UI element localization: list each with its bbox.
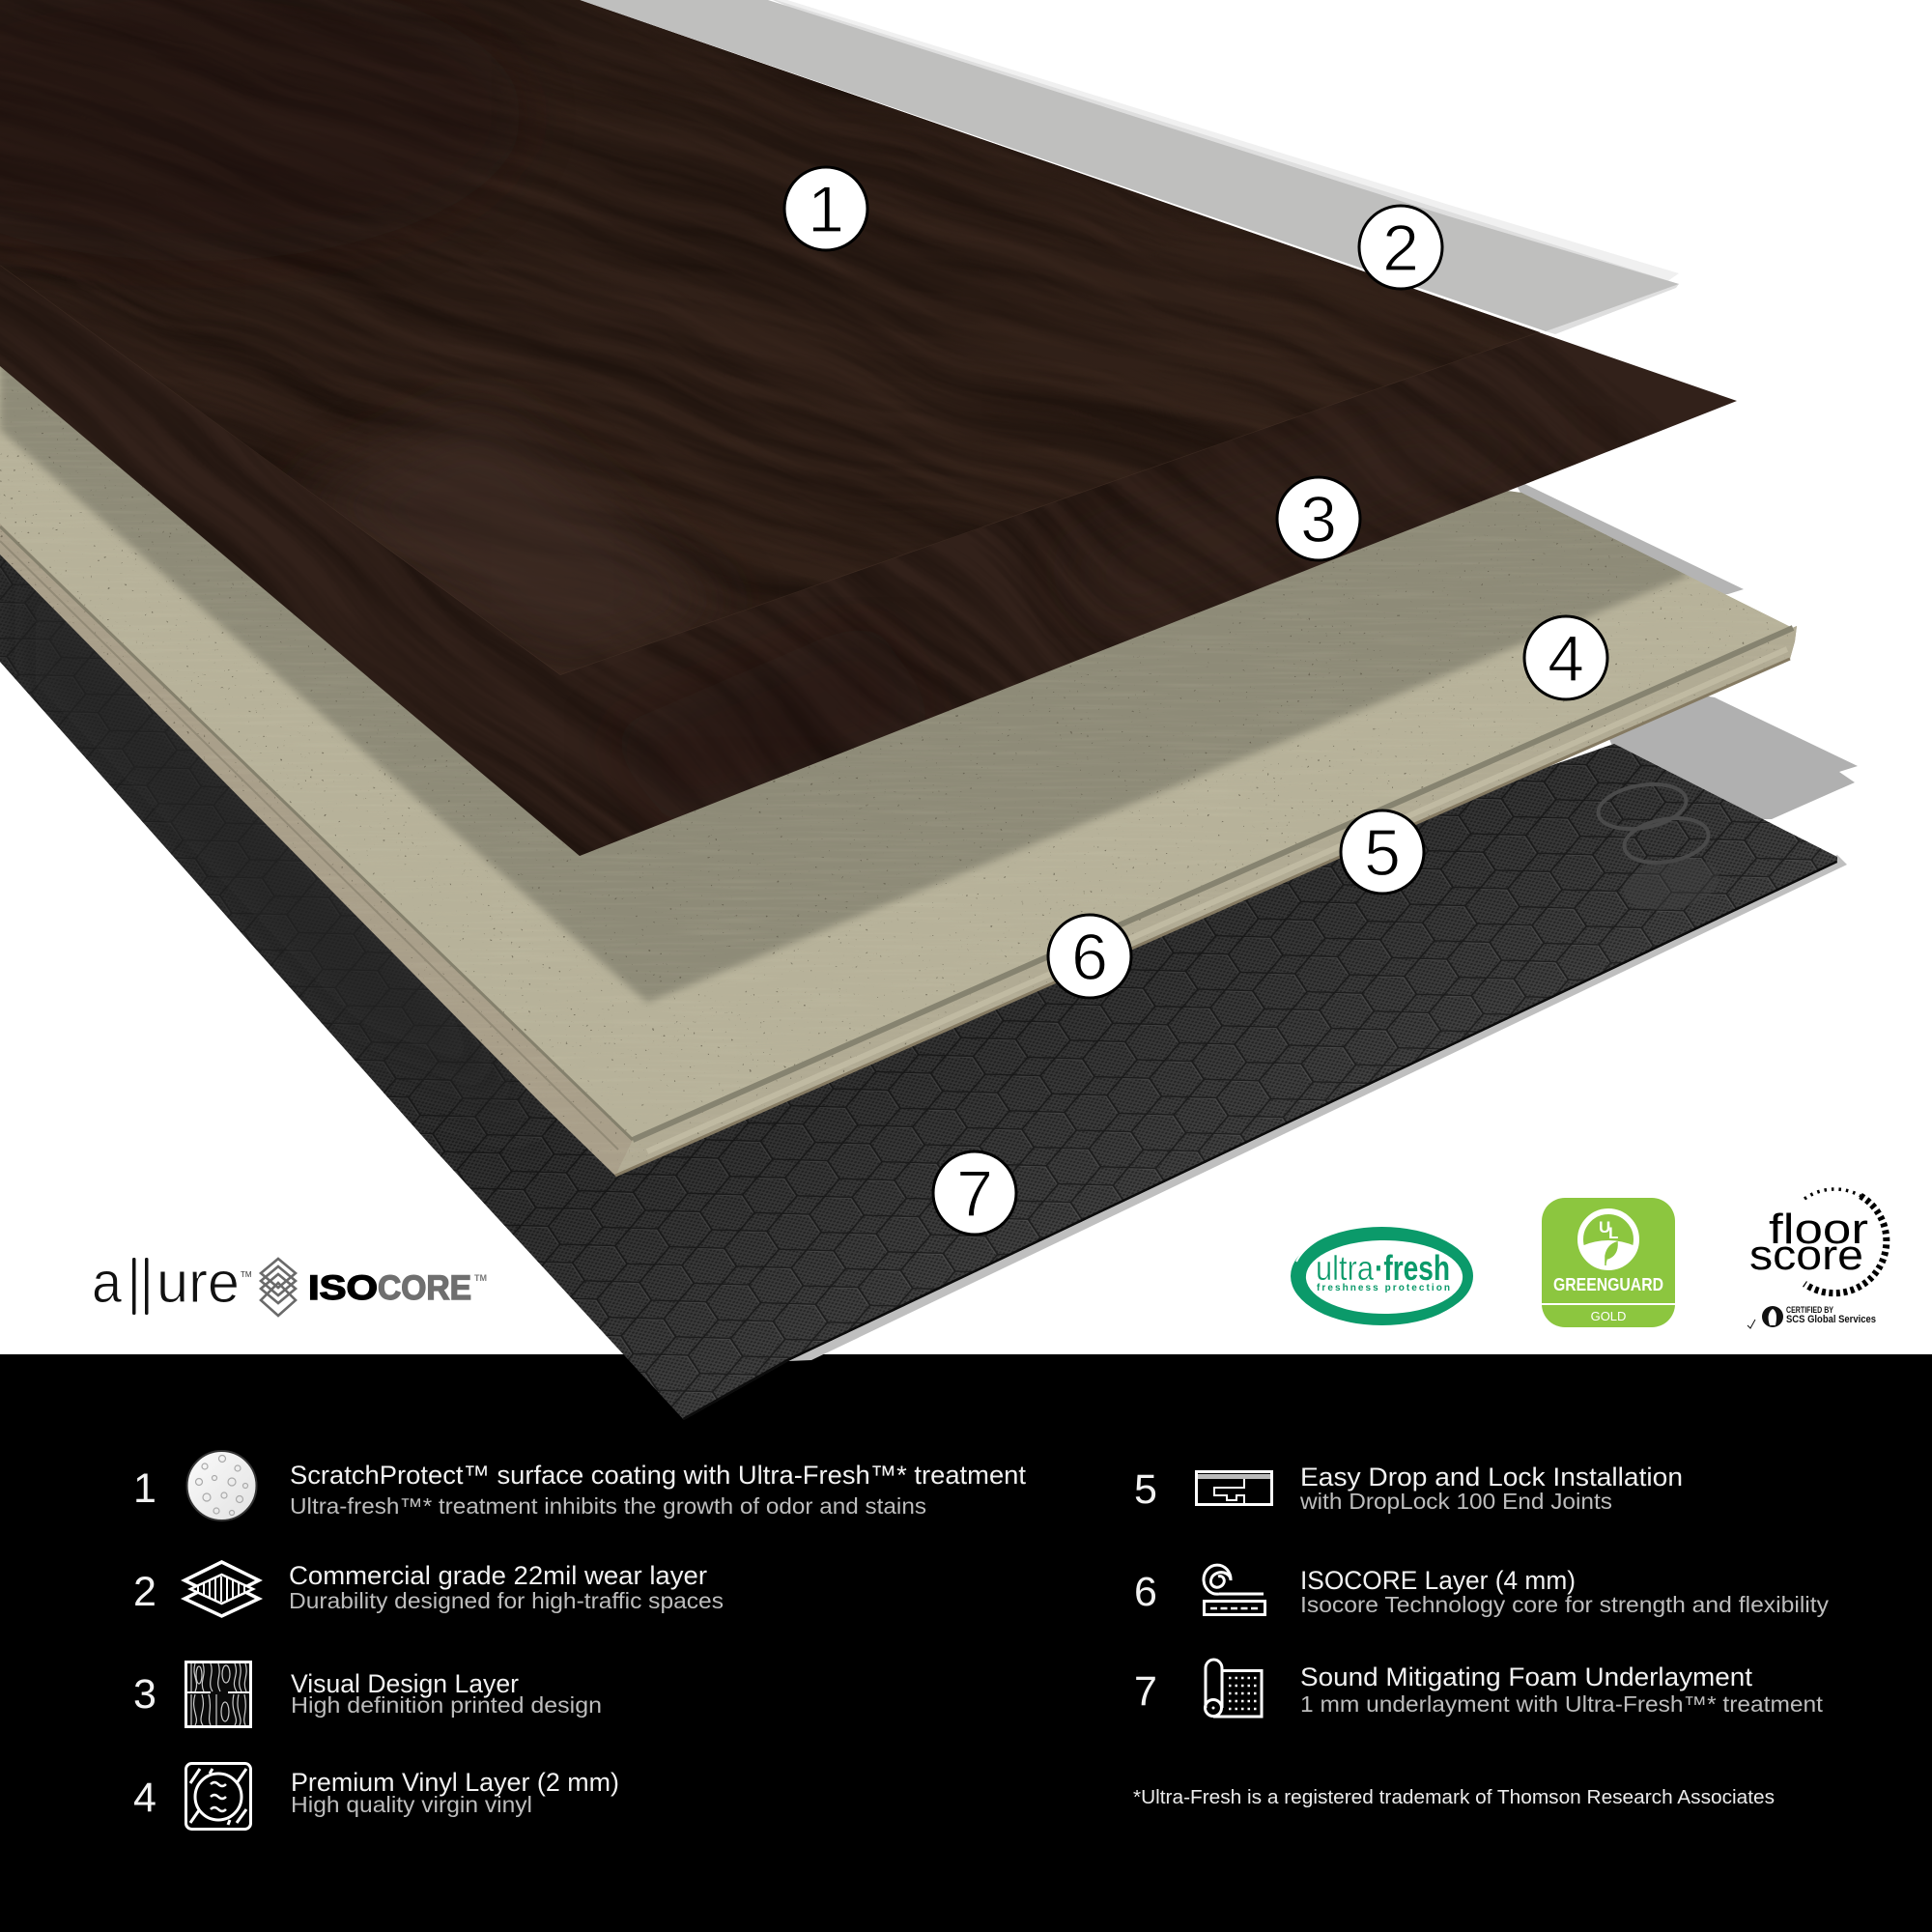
logo: ultra-fresh: ·fresh <box>1375 1248 1450 1288</box>
legend row 1: 1 <box>133 1465 156 1512</box>
icon: stacked wear layers <box>185 1562 259 1616</box>
logo: ultra-fresh <box>1291 1227 1473 1325</box>
legend row 4 <box>133 1764 619 1830</box>
legend row 5: 5 <box>1134 1466 1157 1513</box>
legend row 2: Durability designed for high-traffic spaces <box>289 1588 724 1613</box>
legend row 5: Easy Drop and Lock Installation <box>1300 1463 1683 1492</box>
layer 7 foam underlayment <box>0 554 1837 1420</box>
legend row 1 <box>133 1451 1026 1520</box>
logo: allure: a <box>92 1250 123 1315</box>
icon: wood grain <box>185 1662 251 1727</box>
plank short side lower line <box>0 541 618 1150</box>
badge 3 <box>1277 477 1360 560</box>
legend row 6: 6 <box>1134 1569 1157 1615</box>
logo: UL Greenguard Gold <box>1542 1198 1675 1327</box>
plank groove long edge <box>633 628 1793 1140</box>
number badges <box>784 167 1607 1235</box>
layer 4 vinyl darker surface <box>0 366 1689 1005</box>
legend row 7 <box>1134 1660 1824 1717</box>
logo: isocore wordmark: TM <box>474 1273 487 1283</box>
badge 1 <box>784 167 867 250</box>
legend row 3: 3 <box>133 1671 156 1718</box>
underlayment shadow <box>788 855 1847 1361</box>
grey sheet between plank and underlayment <box>1584 676 1858 821</box>
legend row 3: Visual Design Layer <box>291 1669 519 1698</box>
legend row 2: 2 <box>133 1569 156 1615</box>
badge 5: 5 <box>1364 816 1401 890</box>
badge 2 <box>1359 206 1442 289</box>
logo: UL Greenguard Gold: GOLD <box>1591 1309 1626 1323</box>
badge 3: 3 <box>1300 483 1337 556</box>
badge 4 <box>1524 616 1607 699</box>
plank long side face <box>615 626 1797 1176</box>
footnote: *Ultra-Fresh is a registered trademark of Thomson Research Associates <box>1133 1787 1775 1808</box>
legend row 7: 1 mm underlayment with Ultra-Fresh™* treatment <box>1300 1691 1824 1717</box>
logo: FloorScore <box>1747 1189 1887 1328</box>
logo: FloorScore: SCS Global Services <box>1786 1314 1876 1325</box>
badge 5 <box>1341 810 1424 894</box>
legend row 7: 7 <box>1134 1668 1157 1715</box>
logo: isocore wordmark <box>308 1269 487 1307</box>
badge 1: 1 <box>808 173 844 246</box>
badge 7: 7 <box>956 1157 993 1231</box>
logo: allure: ure <box>156 1250 240 1315</box>
logo: FloorScore: score <box>1749 1232 1863 1279</box>
icon: underlayment roll <box>1206 1660 1262 1717</box>
layer 6 isocore light top surface <box>0 290 1793 1140</box>
badge 4: 4 <box>1548 622 1584 696</box>
logo: allure: TM <box>241 1270 252 1279</box>
legend row 5: with DropLock 100 End Joints <box>1299 1489 1612 1514</box>
layers 4 to 6 plank <box>0 366 1797 1177</box>
legend row 5 <box>1134 1463 1683 1514</box>
icon: isocore roll <box>1204 1565 1265 1615</box>
legend row 4: Premium Vinyl Layer (2 mm) <box>291 1768 619 1797</box>
legend row 3: High definition printed design <box>291 1692 602 1718</box>
black legend panel <box>0 1354 1932 1932</box>
grey sheet behind plank, upper right <box>1513 478 1744 599</box>
legend row 4: 4 <box>133 1775 156 1821</box>
badge 6 <box>1048 915 1131 998</box>
legend row 2: Commercial grade 22mil wear layer <box>289 1561 707 1590</box>
logo: UL Greenguard Gold: U <box>1599 1218 1610 1236</box>
badge 6: 6 <box>1071 921 1108 994</box>
logo: FloorScore: floor <box>1769 1206 1868 1253</box>
legend row 6: ISOCORE Layer (4 mm) <box>1300 1566 1576 1595</box>
legend row 7: Sound Mitigating Foam Underlayment <box>1300 1662 1753 1691</box>
legend row 1: Ultra-fresh™* treatment inhibits the growth of odor and stains <box>290 1493 926 1519</box>
plank bottom edge <box>615 659 1790 1176</box>
legend row 2 <box>133 1561 724 1616</box>
logo: UL Greenguard Gold: GREENGUARD <box>1553 1275 1663 1294</box>
icon: drop and lock joint <box>1196 1472 1271 1505</box>
layer 1 scratch-protect surface sheet <box>0 0 1540 675</box>
logo: ultra-fresh: freshness protection <box>1317 1283 1450 1293</box>
legend row 6 <box>1134 1565 1830 1617</box>
legend row 6: Isocore Technology core for strength and flexibility <box>1300 1592 1830 1617</box>
plank side and tongue <box>0 522 1797 1176</box>
legend row 1: ScratchProtect™ surface coating with Ultra-Fresh™* treatment <box>290 1461 1026 1490</box>
logo: allure <box>92 1250 252 1315</box>
badge 2: 2 <box>1382 212 1419 285</box>
legend row 4: High quality virgin vinyl <box>291 1792 532 1817</box>
plank groove short edge <box>0 526 633 1140</box>
layer 3 visual design layer <box>0 0 1737 856</box>
plank long side highlight <box>647 649 1787 1151</box>
logo: isocore wordmark: CORE <box>378 1269 471 1307</box>
icon: droplet coated surface <box>187 1451 257 1520</box>
legend row 3 <box>133 1662 602 1727</box>
layer 2 wear layer translucent sheet <box>580 0 1679 334</box>
badge 7 <box>933 1151 1016 1235</box>
icon: vinyl layer <box>185 1764 251 1830</box>
logo: ultra-fresh: ultra <box>1316 1248 1375 1288</box>
logo: isocore wordmark: ISO <box>308 1269 378 1307</box>
logo: UL Greenguard Gold: L <box>1608 1224 1618 1242</box>
logo: isocore diamond icon <box>261 1259 296 1316</box>
logo: FloorScore: CERTIFIED BY <box>1786 1305 1833 1315</box>
